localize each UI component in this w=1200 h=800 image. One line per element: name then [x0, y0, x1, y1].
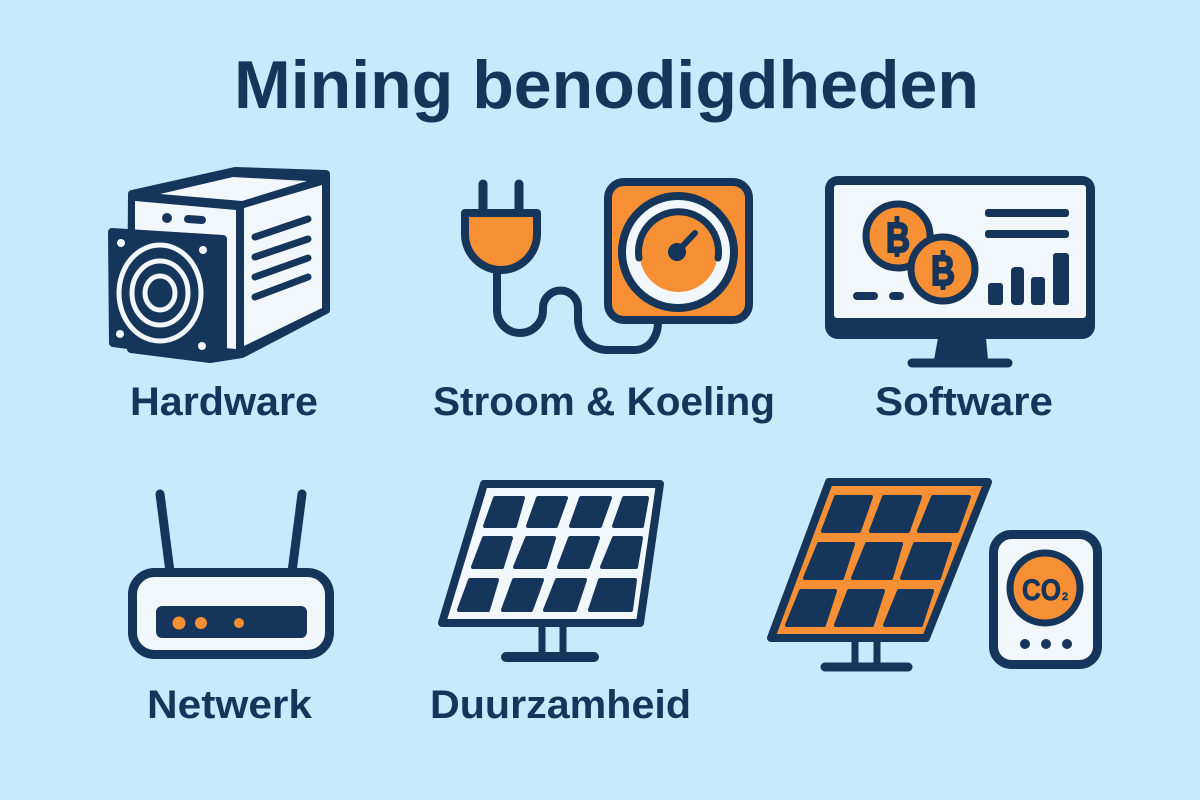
coin 1 — [866, 204, 930, 268]
label: stroom en koeling: Stroom & Koeling — [433, 380, 775, 424]
icon: CO2 meter — [994, 534, 1098, 664]
icon: router — [132, 494, 330, 654]
CO2 text: CO — [1022, 574, 1061, 607]
label: software: Software — [875, 380, 1053, 424]
coin 1: B — [886, 214, 910, 261]
icon: hardware miner — [112, 171, 326, 359]
icon: solar panel — [442, 484, 660, 657]
CO2 subscript: 2 — [1062, 591, 1068, 603]
label: duurzaamheid: Duurzamheid — [430, 683, 691, 727]
label: hardware: Hardware — [130, 380, 318, 424]
icon: plug and power meter — [465, 182, 749, 350]
icon: software monitor — [825, 176, 1095, 363]
coin 2 — [911, 237, 975, 301]
label: netwerk: Netwerk — [147, 683, 313, 727]
coin 2: B — [931, 247, 955, 294]
icon: orange solar panel — [771, 482, 988, 667]
title: Mining benodigdheden — [234, 47, 979, 123]
